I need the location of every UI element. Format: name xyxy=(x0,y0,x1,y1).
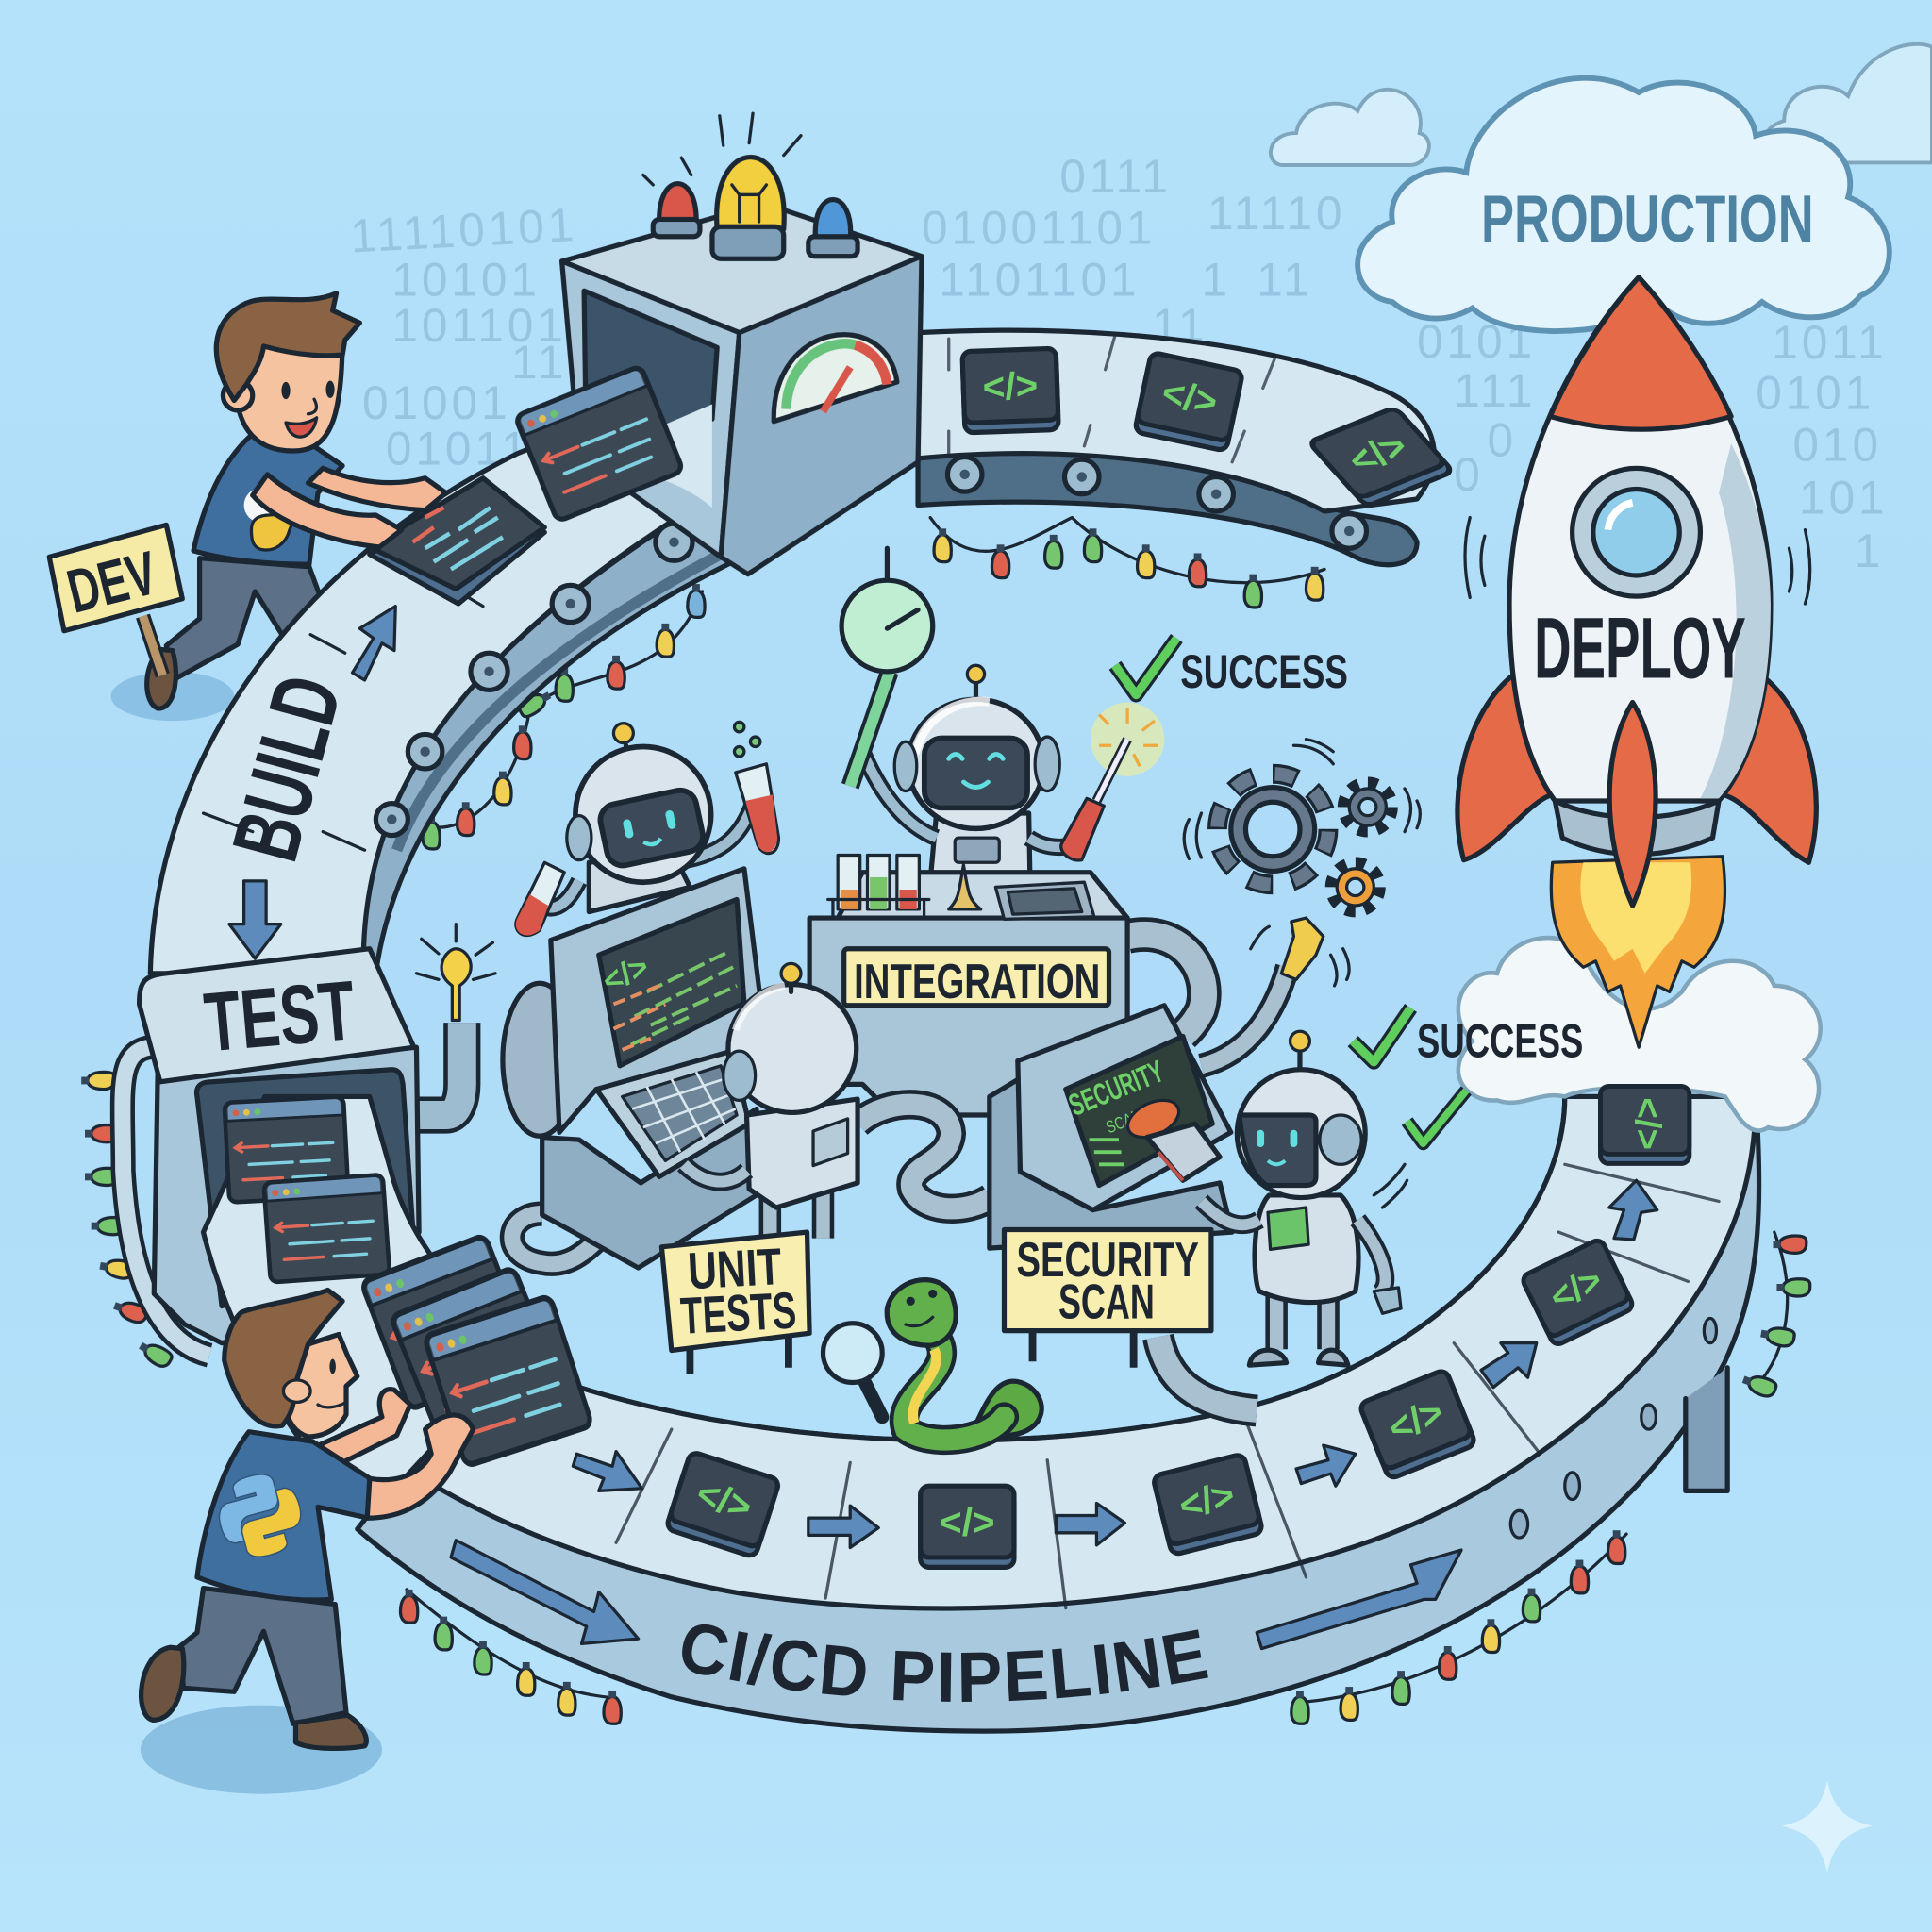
chip: </> xyxy=(940,1500,995,1543)
ear xyxy=(283,1380,310,1402)
security scan sign: SECURITY xyxy=(1017,1233,1199,1288)
computer terminal: </> xyxy=(597,948,654,1000)
code window pushed by developer xyxy=(370,478,544,604)
chip: </> xyxy=(982,363,1039,408)
head xyxy=(234,321,342,451)
chip xyxy=(1153,1454,1263,1556)
binary code backdrop: 11 xyxy=(1152,299,1208,352)
hose right xyxy=(1127,935,1204,1035)
chip xyxy=(1358,1369,1476,1479)
gauge wand xyxy=(850,672,890,786)
hose to security xyxy=(858,1105,991,1208)
bubbles xyxy=(734,722,760,757)
shoe xyxy=(147,649,175,708)
legs xyxy=(166,558,323,679)
machine dark opening xyxy=(584,291,717,468)
developer bottom xyxy=(141,1291,474,1794)
arm xyxy=(684,1164,747,1182)
opening xyxy=(197,1070,414,1306)
unit tests sign xyxy=(661,1232,809,1374)
face xyxy=(281,382,291,399)
security scan machine: SCAN xyxy=(1103,1105,1144,1137)
security scan machine: SECURITY xyxy=(1064,1053,1169,1123)
inner side band xyxy=(358,487,736,974)
developer top lower body xyxy=(111,558,323,721)
screwdriver xyxy=(1096,740,1127,801)
nose cone xyxy=(1550,277,1731,429)
python logo xyxy=(210,1466,309,1565)
code window stack xyxy=(361,1235,592,1466)
tube rack xyxy=(828,855,929,918)
code window in test xyxy=(225,1096,349,1203)
chip: </> xyxy=(1158,370,1222,425)
body xyxy=(1509,277,1771,801)
sparkle watermark xyxy=(1782,1780,1873,1873)
binary code backdrop: 10101 xyxy=(391,253,541,306)
DEV sign xyxy=(49,525,182,675)
top chip over cloud: </> xyxy=(1627,1097,1668,1150)
antenna xyxy=(625,745,628,770)
computer terminal xyxy=(503,869,770,1268)
alarm lights xyxy=(643,113,858,258)
head xyxy=(908,699,1043,828)
binary code backdrop: 111 xyxy=(1454,364,1536,417)
check 3 xyxy=(1407,1091,1466,1143)
integration desk: INTEGRATION xyxy=(854,955,1100,1009)
hair xyxy=(216,293,359,400)
head xyxy=(728,985,857,1112)
machine body xyxy=(154,1047,419,1343)
chip: </> xyxy=(1337,425,1419,480)
binary code backdrop: 0 xyxy=(1487,413,1517,466)
belt top surface xyxy=(394,1096,1756,1608)
legs xyxy=(1276,1293,1328,1349)
binary code backdrop: 11110 xyxy=(1208,187,1346,240)
build machine xyxy=(370,113,922,604)
motion marks xyxy=(1184,740,1420,858)
chip xyxy=(921,1486,1014,1567)
arms xyxy=(862,752,1084,847)
machine right side xyxy=(721,257,922,575)
screen xyxy=(599,899,744,1066)
body xyxy=(1255,1195,1358,1303)
white logo lobe xyxy=(244,488,278,523)
binary code backdrop: 101 xyxy=(1799,472,1889,525)
top chip over cloud xyxy=(1601,1086,1690,1163)
motion marks xyxy=(1465,518,1810,604)
right arm xyxy=(672,808,752,862)
binary code backdrop: 101101 xyxy=(391,299,567,352)
porthole xyxy=(1573,468,1700,596)
orange gear xyxy=(1331,862,1380,912)
chip: </> xyxy=(1382,1390,1449,1451)
success check 2: SUCCESS xyxy=(1417,1015,1583,1068)
pipeline arrows on the side band xyxy=(451,1541,639,1643)
inner belt xyxy=(204,1096,530,1516)
binary code backdrop: 0101 xyxy=(1417,315,1536,368)
chip xyxy=(1135,352,1243,451)
monitor xyxy=(551,869,770,1132)
rollers xyxy=(947,458,1366,548)
shirt xyxy=(197,1432,372,1600)
arms xyxy=(1201,1201,1385,1293)
binary code backdrop: 1101101 xyxy=(939,253,1141,306)
rollers xyxy=(375,524,692,836)
rear body xyxy=(990,1078,1232,1248)
binary code backdrop: 1011 xyxy=(1772,316,1888,369)
build conveyor belt xyxy=(150,370,736,974)
chip xyxy=(1521,1238,1635,1346)
launch smoke cloud xyxy=(1458,938,1821,1131)
gears xyxy=(1184,740,1420,912)
legs xyxy=(770,1189,823,1239)
lower hose xyxy=(1158,1337,1257,1411)
antenna xyxy=(974,680,977,712)
support leg xyxy=(1686,1368,1727,1491)
production cloud xyxy=(1357,78,1890,331)
robot at computer, test tubes xyxy=(516,722,778,936)
code window entering xyxy=(515,366,683,522)
machine top xyxy=(140,949,414,1082)
torso xyxy=(930,813,1030,881)
machine top xyxy=(562,204,922,333)
rocket xyxy=(1457,277,1816,906)
gauge xyxy=(774,335,897,422)
build label: BUILD xyxy=(213,665,362,871)
arms xyxy=(308,468,446,510)
chip: </> xyxy=(1174,1473,1239,1527)
test tube right xyxy=(736,764,778,854)
knob xyxy=(949,865,981,909)
success check 1 xyxy=(1115,639,1348,698)
motion marks xyxy=(1374,1164,1407,1208)
base xyxy=(542,1109,757,1268)
keyboard xyxy=(596,1051,749,1176)
shadow xyxy=(141,1706,382,1794)
nozzle xyxy=(1555,801,1719,855)
binary code backdrop: 010 xyxy=(1792,418,1882,471)
arrow up xyxy=(353,607,395,680)
left fin xyxy=(1457,672,1553,860)
string lights xyxy=(81,518,1810,1724)
binary code backdrop: 0101 xyxy=(1756,367,1874,420)
mouth xyxy=(318,1402,346,1407)
lamp pipe xyxy=(416,1023,462,1115)
integration sign xyxy=(844,949,1109,1006)
test tube left xyxy=(516,862,564,936)
left pipe xyxy=(123,1047,209,1356)
pipeline title xyxy=(675,1668,1217,1702)
DEV sign: DEV xyxy=(60,538,163,626)
arrow down xyxy=(229,881,281,958)
success check 2 xyxy=(1353,1008,1583,1068)
binary code backdrop: 11110101 xyxy=(349,198,579,263)
developer top xyxy=(193,293,446,564)
integration desk xyxy=(809,855,1204,1115)
code chips on bottom belt xyxy=(666,1238,1635,1567)
bottom conveyor belt: CI/CD PIPELINE xyxy=(682,1624,1208,1702)
shadow xyxy=(111,672,234,721)
earpiece xyxy=(567,816,591,860)
binary code backdrop: 01011 xyxy=(386,422,531,475)
yellow logo lobe xyxy=(251,515,295,550)
arm front xyxy=(367,1415,474,1518)
hair xyxy=(225,1291,342,1426)
binary code backdrop: 1 xyxy=(1855,525,1884,577)
center fin xyxy=(1609,702,1656,906)
binary code backdrop: 01001101 xyxy=(922,202,1156,255)
large gear xyxy=(1217,774,1328,885)
small background clouds xyxy=(1271,44,1932,165)
unit tests sign: TESTS xyxy=(679,1280,798,1345)
bottom conveyor belt xyxy=(319,1094,1797,1767)
binary code backdrop: 0 xyxy=(1454,448,1484,501)
scanner xyxy=(1122,1092,1185,1144)
robot with gauge and screwdriver xyxy=(841,548,1164,881)
belt seams xyxy=(616,1164,1719,1607)
security scan sign: SCAN xyxy=(1058,1275,1155,1330)
code window in test xyxy=(264,1174,390,1282)
binary code backdrop: 0111 xyxy=(1059,150,1172,203)
chip: </> xyxy=(691,1471,758,1529)
chip xyxy=(1308,408,1453,507)
glow xyxy=(1091,702,1164,776)
security scan machine xyxy=(990,1006,1232,1248)
test machine xyxy=(123,924,530,1516)
head xyxy=(286,1335,358,1437)
binary code backdrop xyxy=(349,150,1889,577)
security scan sign xyxy=(1004,1230,1211,1368)
rocket exhaust flame xyxy=(1551,857,1724,1047)
screen xyxy=(1066,1036,1212,1185)
deploy label: DEPLOY xyxy=(1534,600,1746,696)
head xyxy=(1237,1070,1365,1198)
binary code backdrop: 11 xyxy=(1257,253,1313,306)
unit tests sign: UNIT xyxy=(687,1237,783,1300)
front xyxy=(1018,1006,1231,1210)
shirt xyxy=(193,434,342,564)
production label: PRODUCTION xyxy=(1481,181,1814,256)
success check 1: SUCCESS xyxy=(1180,645,1348,698)
head xyxy=(563,734,724,895)
eye xyxy=(329,1359,336,1374)
python snake xyxy=(887,1280,1041,1440)
arm back xyxy=(313,1390,410,1473)
chip xyxy=(962,348,1058,433)
yellow lamp xyxy=(441,949,471,1020)
test label: TEST xyxy=(201,963,358,1069)
cable xyxy=(512,1214,607,1264)
binary code backdrop: 11 xyxy=(511,336,567,389)
tablet xyxy=(995,882,1094,919)
antenna xyxy=(1298,1047,1302,1078)
small gear xyxy=(1343,782,1392,832)
chip xyxy=(666,1451,780,1557)
upper conveyor belt xyxy=(918,330,1453,565)
right fin xyxy=(1723,672,1816,862)
binary code backdrop: 01001 xyxy=(362,376,511,429)
left arm xyxy=(542,881,579,908)
chip: </> xyxy=(1543,1259,1608,1319)
magnifier xyxy=(823,1324,882,1417)
rear drum xyxy=(503,983,576,1136)
legs xyxy=(178,1589,346,1724)
belt surface xyxy=(150,370,727,974)
body xyxy=(747,1099,858,1208)
belt direction arrows xyxy=(573,1180,1657,1547)
body xyxy=(589,850,690,912)
binary code backdrop: 1 xyxy=(1201,253,1231,306)
antenna xyxy=(790,979,793,991)
machine front frame xyxy=(562,261,740,557)
robot at keyboard, back view xyxy=(684,963,991,1239)
robotic arm with wrench xyxy=(1201,918,1349,1066)
side band studs xyxy=(1510,1319,1716,1538)
security robot xyxy=(1158,1031,1407,1411)
